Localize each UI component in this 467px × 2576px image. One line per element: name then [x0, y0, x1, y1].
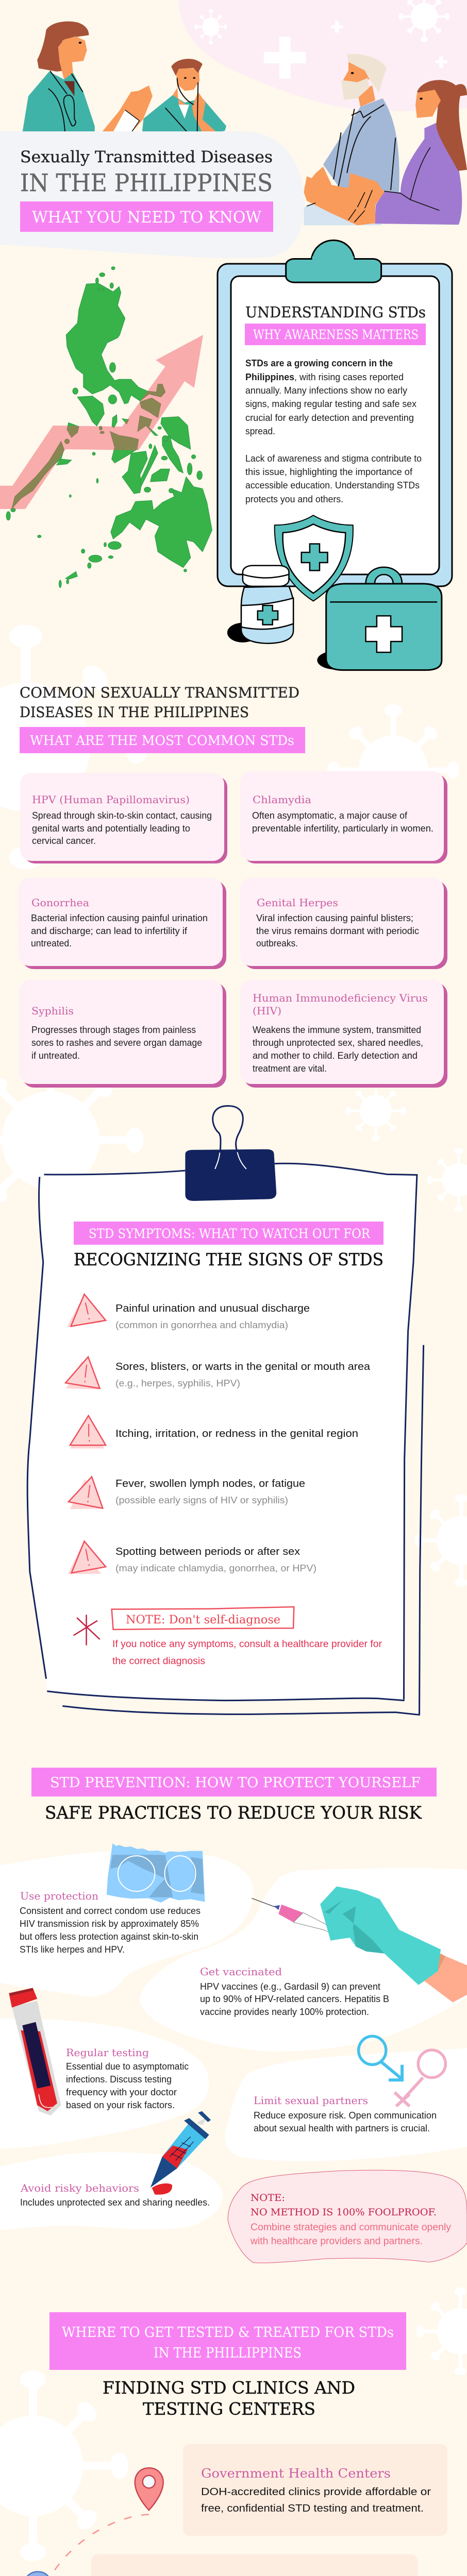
card: syphilis: if untreated. — [31, 1050, 80, 1061]
item: avoid risky behaviors: Includes unprotected sex and sharing needles. — [20, 2197, 210, 2208]
item: limit sexual partners — [254, 2036, 445, 2133]
symptom: spotting: Spotting between periods or after sex — [115, 1546, 300, 1557]
card: syphilis: sores to rashes and severe organ damage — [31, 1038, 202, 1048]
callout: don't self-diagnose — [74, 1607, 382, 1667]
item: use protection: but offers less protection against skin-to-skin — [20, 1931, 198, 1942]
icon: blue map pin — [24, 2572, 52, 2576]
text: why it matters: Philippines, with rising cases reported — [245, 372, 404, 382]
banner: where to get tested: WHERE TO GET TESTED & TREATED FOR STDs — [62, 2325, 394, 2341]
item: use protection: Consistent and correct condom use reduces — [20, 1906, 201, 1916]
icon: red map pin — [135, 2468, 163, 2510]
banner: prevention: STD PREVENTION: HOW TO PROTECT YOURSELF — [50, 1775, 421, 1791]
title: location: IN THE PHILIPPINES — [20, 169, 273, 197]
card: HPV: cervical cancer. — [32, 836, 96, 846]
item: get vaccinated: Get vaccinated — [200, 1965, 282, 1978]
item: get vaccinated: vaccine provides nearly 100% protection. — [200, 2007, 369, 2017]
card: HIV: treatment are vital. — [253, 1063, 327, 1074]
callout: no method is foolproof: with healthcare providers and partners. — [250, 2236, 423, 2247]
banner: symptoms — [74, 1222, 383, 1245]
card: government health centers — [135, 2444, 447, 2536]
card: syphilis: Progresses through stages from painless — [31, 1025, 196, 1035]
card: HIV: Human Immunodeficiency Virus — [253, 992, 428, 1004]
callout: no method is foolproof: NO METHOD IS 100% FOOLPROOF. — [251, 2207, 437, 2218]
banner: prevention — [31, 1768, 437, 1797]
dashed route between pins — [4, 2515, 149, 2576]
arrow: rising trend — [0, 335, 203, 509]
card: gonorrhea: untreated. — [31, 938, 72, 948]
icon: blood test tube — [9, 1988, 61, 2115]
text: why it matters: annually. Many infections show no early — [245, 385, 407, 396]
text: why it matters: accessible education. Understanding STDs — [245, 480, 420, 490]
heading: common STDs — [20, 684, 299, 721]
card: gonorrhea: and discharge; can lead to infertility if — [31, 926, 188, 936]
banner: symptoms: STD SYMPTOMS: WHAT TO WATCH OUT FOR — [89, 1226, 371, 1241]
clipboard clip — [286, 240, 381, 282]
card: HPV: genital warts and potentially leading to — [32, 823, 190, 834]
item: get vaccinated: HPV vaccines (e.g., Gardasil 9) can prevent — [200, 1981, 380, 1992]
card: genital herpes: Viral infection causing painful blisters; — [256, 913, 413, 923]
symptom: spotting — [68, 1541, 316, 1574]
item: get vaccinated — [200, 1886, 467, 2017]
heading: UNDERSTANDING STDs — [245, 303, 426, 321]
heading: finding clinics — [103, 2378, 355, 2419]
panel: understanding STDs clipboard — [218, 240, 452, 670]
callout: don't self-diagnose: the correct diagnosis — [112, 1656, 205, 1667]
item: limit sexual partners: Reduce exposure risk. Open communication — [254, 2110, 437, 2121]
card: genital herpes: Genital Herpes — [257, 896, 338, 909]
title: Sexually Transmitted Diseases — [20, 148, 273, 166]
card: chlamydia: Often asymptomatic, a major cause of — [252, 810, 408, 821]
symptom: sores: (e.g., herpes, syphilis, HPV) — [115, 1378, 240, 1388]
card: chlamydia — [240, 771, 447, 863]
heading: safe practices: SAFE PRACTICES TO REDUCE YOUR RISK — [45, 1803, 422, 1823]
text: why it matters — [245, 358, 422, 504]
text: why it matters: this issue, highlighting the importance of — [245, 467, 413, 477]
heading: recognizing the signs: RECOGNIZING THE SIGNS OF STDS — [74, 1249, 383, 1269]
card: HPV: HPV (Human Papillomavirus) — [32, 793, 190, 806]
item: regular testing: Regular testing — [66, 2046, 149, 2059]
banner: most common STDs: WHAT ARE THE MOST COMMON STDs — [30, 733, 294, 749]
text: why it matters: Lack of awareness and stigma contribute to — [245, 453, 422, 464]
symptom: spotting: (may indicate chlamydia, gonorrhea, or HPV) — [115, 1563, 316, 1573]
icon: gloved hand with syringe — [252, 1886, 467, 2002]
card: HIV — [240, 980, 447, 1088]
title panel — [0, 131, 305, 258]
heading: common STDs: DISEASES IN THE PHILIPPINES — [20, 704, 249, 721]
card: government health centers: Government Health Centers — [201, 2466, 391, 2481]
card: genital herpes: the virus remains dormant with periodic — [256, 926, 419, 936]
item: use protection — [20, 1843, 205, 1955]
card: genital herpes — [240, 878, 447, 969]
illustration: woman doctor — [22, 21, 153, 133]
card: HIV: (HIV) — [253, 1005, 281, 1017]
illustration: older man and woman — [304, 54, 467, 225]
symptom: painful urination: Painful urination and unusual discharge — [115, 1303, 310, 1314]
heading: common STDs: COMMON SEXUALLY TRANSMITTED — [20, 684, 299, 701]
heading: finding clinics: FINDING STD CLINICS AND — [103, 2378, 355, 2398]
card: gonorrhea: Bacterial infection causing painful urination — [31, 913, 208, 923]
callout: no method is foolproof: Combine strategies and communicate openly — [251, 2222, 451, 2233]
symptom: itching: Itching, irritation, or redness in the genital region — [115, 1428, 358, 1439]
symptom: painful urination — [67, 1294, 310, 1330]
item: get vaccinated: up to 90% of HPV-related cancers. Hepatitis B — [200, 1994, 389, 2004]
illustration: male doctor — [142, 59, 226, 133]
card: government health centers: DOH-accredited clinics provide affordable or — [201, 2486, 431, 2498]
banner: why awareness matters — [245, 324, 426, 345]
callout: don't self-diagnose: NOTE: Don't self-diagnose — [126, 1614, 280, 1626]
item: avoid risky behaviors: Avoid risky behaviors — [20, 2182, 139, 2194]
text: why it matters: crucial for early detection and preventing — [245, 413, 414, 423]
callout: no method is foolproof — [228, 2170, 467, 2263]
icon: binder clip — [185, 1106, 276, 1201]
card: government health centers: free, confidential STD testing and treatment. — [201, 2503, 424, 2514]
text: why it matters: STDs are a growing concern in the — [245, 358, 393, 368]
card: chlamydia: preventable infertility, particularly in women. — [252, 823, 433, 834]
background virus decorations — [0, 624, 467, 2576]
icon: gender symbols — [359, 2036, 445, 2106]
item: regular testing: based on your risk factors. — [66, 2100, 175, 2110]
card: HPV — [20, 773, 227, 863]
card: HIV: through unprotected sex, shared needles, — [253, 1038, 423, 1048]
heading: finding clinics: TESTING CENTERS — [143, 2399, 315, 2419]
callout: don't self-diagnose: If you notice any symptoms, consult a healthcare provider for — [112, 1639, 382, 1650]
prevention white blobs — [0, 1851, 467, 2230]
item: use protection: STIs like herpes and HPV. — [20, 1944, 125, 1955]
text: why it matters: protects you and others. — [245, 494, 343, 504]
item: regular testing: frequency with your doctor — [66, 2087, 177, 2097]
banner: where to get tested: IN THE PHILLIPPINES — [154, 2345, 302, 2361]
item: use protection: Use protection — [20, 1890, 98, 1902]
banner: most common STDs — [20, 727, 305, 753]
item: limit sexual partners: Limit sexual partners — [254, 2094, 368, 2107]
card: gonorrhea — [19, 878, 226, 969]
symptom: fever — [69, 1477, 305, 1509]
header illustration backdrop — [179, 0, 467, 111]
card: gonorrhea: Gonorrhea — [31, 896, 89, 909]
item: limit sexual partners: about sexual health with partners is crucial. — [254, 2123, 430, 2133]
item: regular testing: Essential due to asymptomatic — [66, 2061, 189, 2072]
symptom: itching — [70, 1416, 358, 1449]
text: why it matters: spread. — [245, 426, 275, 436]
item: regular testing — [9, 1988, 189, 2115]
symptom: fever: (possible early signs of HIV or syphilis) — [115, 1495, 288, 1505]
subtitle banner: WHAT YOU NEED TO KNOW — [32, 208, 261, 227]
card: HPV: Spread through skin-to-skin contact, causing — [32, 810, 212, 821]
symptom: painful urination: (common in gonorrhea and chlamydia) — [115, 1320, 288, 1330]
text: why it matters: signs, making regular testing and safe sex — [245, 399, 416, 409]
card: syphilis: Syphilis — [31, 1005, 74, 1017]
map of the Philippines with rising arrow — [0, 267, 212, 588]
subtitle banner — [20, 201, 273, 232]
panel: symptoms note paper — [27, 1106, 424, 1715]
card: HIV: and mother to child. Early detection and — [253, 1050, 418, 1061]
icon: blood syringe — [151, 2111, 211, 2195]
item: avoid risky behaviors — [20, 2111, 211, 2208]
icon: medical shield, bottle and kit — [227, 515, 442, 670]
symptom: sores — [65, 1357, 371, 1389]
card: chlamydia: Chlamydia — [253, 793, 311, 806]
icon: condom packets — [107, 1843, 205, 1903]
card: NGOs — [24, 2554, 418, 2576]
item: use protection: HIV transmission risk by approximately 85% — [20, 1919, 199, 1929]
banner: why awareness matters: WHY AWARENESS MATTERS — [253, 327, 419, 342]
card: genital herpes: outbreaks. — [256, 938, 298, 948]
card: HIV: Weakens the immune system, transmitted — [253, 1025, 421, 1035]
banner: where to get tested — [49, 2312, 406, 2370]
symptom: sores: Sores, blisters, or warts in the genital or mouth area — [115, 1361, 371, 1372]
callout: no method is foolproof: NOTE: — [251, 2192, 285, 2204]
symptom: fever: Fever, swollen lymph nodes, or fatigue — [115, 1478, 305, 1489]
card: syphilis — [19, 980, 226, 1088]
item: regular testing: infections. Discuss testing — [66, 2074, 172, 2084]
